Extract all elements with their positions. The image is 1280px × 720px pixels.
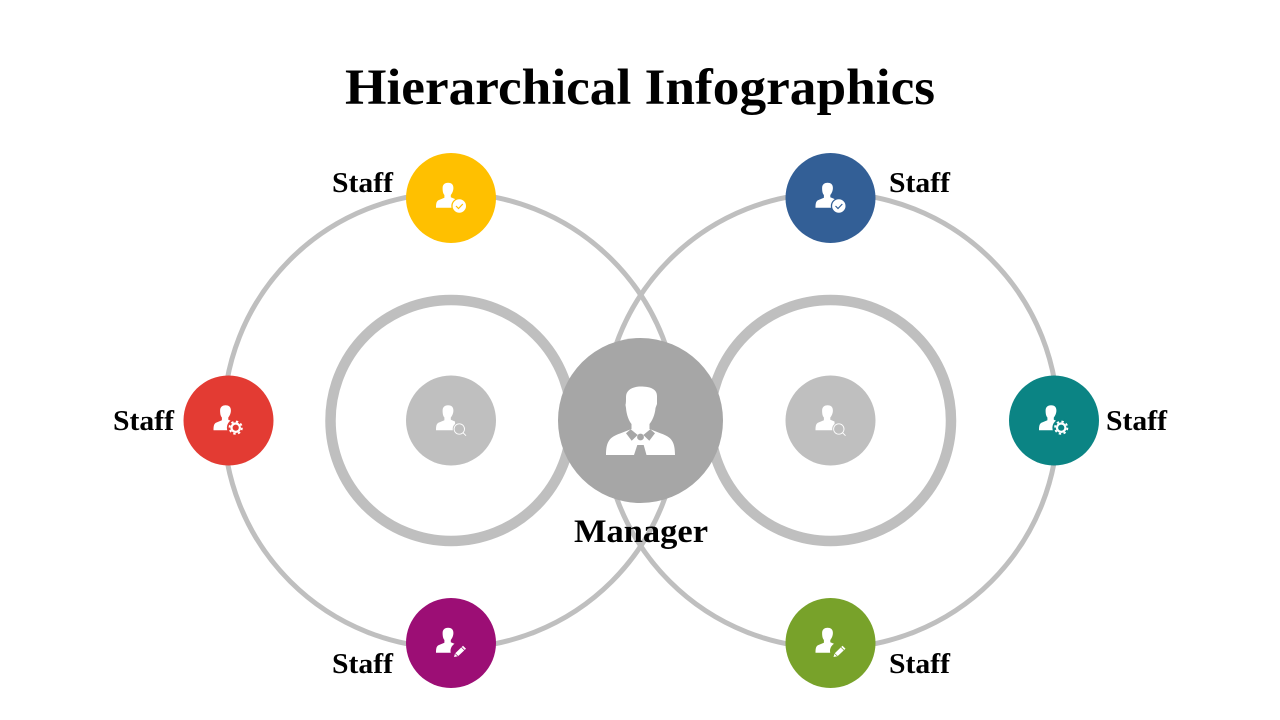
label: staff top right: Staff — [889, 168, 951, 199]
blue staff node — [786, 153, 876, 243]
label: staff top left: Staff — [332, 168, 394, 199]
red staff node — [184, 376, 274, 466]
label: staff middle right: Staff — [1106, 406, 1168, 437]
icon: manager — [606, 386, 675, 455]
purple staff node — [406, 598, 496, 688]
right inner node: search — [786, 376, 876, 466]
left outer ring — [224, 193, 678, 648]
label: staff bottom left: Staff — [332, 649, 394, 680]
green staff node — [786, 598, 876, 688]
yellow staff node — [406, 153, 496, 243]
left inner ring — [330, 300, 572, 541]
right inner ring — [710, 300, 951, 541]
title: Hierarchical Infographics — [345, 60, 935, 116]
label: manager: Manager — [574, 514, 708, 550]
label: staff bottom right: Staff — [889, 649, 951, 680]
label: staff middle left: Staff — [113, 406, 175, 437]
manager node — [558, 338, 723, 503]
teal staff node — [1009, 376, 1099, 466]
left inner node: search — [406, 376, 496, 466]
right outer ring — [603, 193, 1058, 648]
